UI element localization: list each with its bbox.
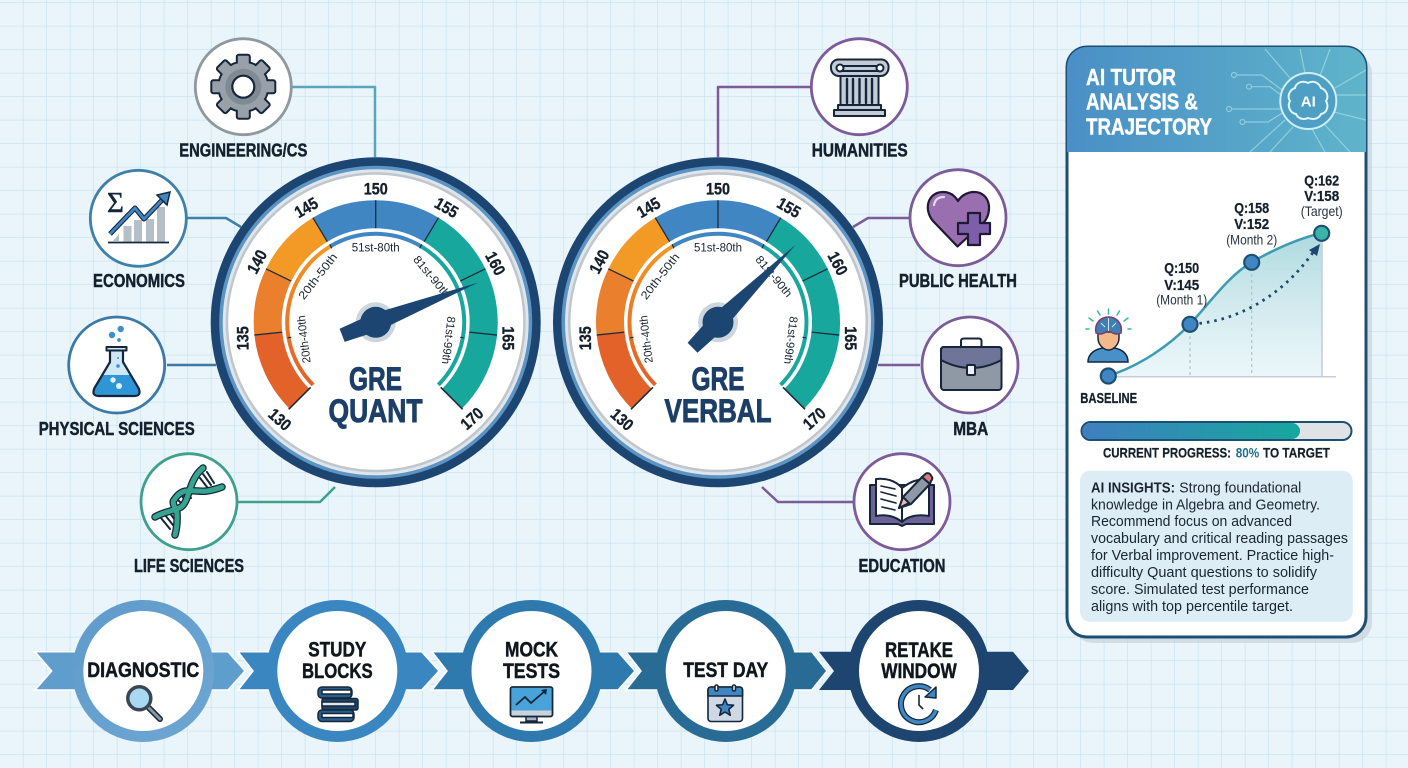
scale labels: verbal: 160 xyxy=(824,249,851,279)
scale labels: verbal: 170 xyxy=(800,404,830,434)
panel title: ANALYSIS & xyxy=(1086,88,1198,114)
connector: engineering xyxy=(291,87,375,157)
label: target: V:158 xyxy=(1304,188,1339,205)
AI insights box: vocabulary and critical reading passages xyxy=(1091,530,1348,547)
panel: life sciences discipline xyxy=(134,454,244,576)
icon: monitor with chart xyxy=(510,687,552,722)
AI insights box: knowledge in Algebra and Geometry. xyxy=(1091,496,1320,513)
AI insights box: difficulty Quant questions to solidify xyxy=(1091,564,1317,581)
percentile labels: quant: 20th-50th xyxy=(297,252,340,302)
step: retake window: RETAKE xyxy=(885,638,953,662)
step: mock tests: MOCK xyxy=(505,638,558,662)
icon: circuit lines xyxy=(1226,49,1366,152)
percentile labels: quant: 81st-90th xyxy=(410,254,452,300)
step: study blocks xyxy=(272,606,403,736)
step: retake window: WINDOW xyxy=(881,659,957,683)
AI insights box: score. Simulated test performance xyxy=(1091,581,1309,598)
panel title xyxy=(1086,64,1212,140)
scale labels: verbal: 140 xyxy=(586,247,613,277)
icon: AI brain xyxy=(1289,82,1327,119)
panel header xyxy=(1067,47,1366,152)
AI insights box: AI INSIGHTS: xyxy=(1091,479,1175,496)
panel: MBA discipline xyxy=(922,317,1018,439)
panel: physical sciences discipline xyxy=(39,317,195,439)
icon: column xyxy=(831,60,889,116)
step: study blocks: BLOCKS xyxy=(302,659,373,683)
connector: public health xyxy=(853,218,909,227)
timeline step 5 ribbon xyxy=(819,652,1029,690)
progress bar xyxy=(1082,422,1352,461)
percentile labels: quant: 51st-80th xyxy=(352,242,400,254)
scale labels: verbal: 165 xyxy=(841,326,859,350)
step: retake window xyxy=(854,606,984,736)
panel: humanities discipline xyxy=(811,39,908,160)
percentile labels: verbal: 51st-80th xyxy=(694,242,742,254)
step: study blocks: STUDY xyxy=(308,638,366,662)
gauge title: verbal xyxy=(664,361,772,429)
icon: gear xyxy=(211,55,275,119)
icon: flask xyxy=(93,326,140,396)
needle: quant xyxy=(339,274,482,344)
icon: calendar with star xyxy=(708,685,742,722)
panel: education discipline xyxy=(854,454,950,576)
scale labels: verbal xyxy=(577,180,859,435)
percentile labels: verbal: 20th-40th xyxy=(638,315,656,364)
icon: AI brain: AI xyxy=(1301,94,1316,110)
percentile labels: verbal xyxy=(638,242,799,365)
step: mock tests: TESTS xyxy=(503,659,560,683)
AI insights box: Recommend focus on advanced xyxy=(1091,513,1292,530)
percentile labels: verbal: 81st-90th xyxy=(753,254,794,300)
panel: AI tutor analysis xyxy=(1067,47,1372,643)
icon: briefcase xyxy=(941,338,1002,390)
scale labels: quant: 140 xyxy=(244,247,271,277)
AI insights box: Strong foundational xyxy=(1179,479,1301,496)
percentile labels: quant: 81st-99th xyxy=(439,316,457,365)
icon: sigma and growth chart: Σ xyxy=(107,187,124,219)
scale labels: verbal: 135 xyxy=(577,326,595,350)
scale labels: quant: 165 xyxy=(499,326,517,350)
scale labels: verbal: 150 xyxy=(706,180,730,198)
label: month 1: V:145 xyxy=(1164,277,1199,294)
label: month 1: (Month 1) xyxy=(1156,292,1207,308)
scale labels: quant: 170 xyxy=(457,404,487,434)
panel: public health discipline xyxy=(899,170,1017,291)
step: test day: TEST DAY xyxy=(683,658,768,682)
label: humanities: HUMANITIES xyxy=(812,140,908,160)
step: mock tests xyxy=(466,606,597,736)
gauge: GRE Verbal xyxy=(553,157,883,487)
connector: MBA xyxy=(878,364,920,366)
step: test day xyxy=(660,606,791,736)
label: public health: PUBLIC HEALTH xyxy=(899,271,1017,291)
AI insights box xyxy=(1080,471,1353,622)
label: month 2: Q:158 xyxy=(1234,200,1269,217)
timeline step 2 ribbon xyxy=(238,652,439,690)
needle: verbal xyxy=(686,238,802,354)
progress label: TO TARGET xyxy=(1263,445,1330,461)
timeline step 3 ribbon xyxy=(432,652,635,690)
progress label xyxy=(1103,445,1330,461)
label: target xyxy=(1301,172,1343,219)
gauge title: quant: GRE xyxy=(349,361,402,397)
step: diagnostic: DIAGNOSTIC xyxy=(87,658,199,682)
icon: stacked books xyxy=(318,687,358,722)
icon: heart with cross xyxy=(928,192,990,246)
panel title: AI TUTOR xyxy=(1086,64,1176,90)
label: economics: ECONOMICS xyxy=(93,271,185,291)
panel title: TRAJECTORY xyxy=(1086,114,1212,140)
scale labels: quant xyxy=(235,180,517,435)
label: engineering: ENGINEERING/CS xyxy=(179,140,307,160)
gauge: GRE Quant xyxy=(211,157,541,487)
panel: engineering discipline xyxy=(179,39,307,160)
label: month 1: Q:150 xyxy=(1164,260,1199,277)
scale labels: quant: 130 xyxy=(264,405,294,435)
gauge title: verbal: GRE xyxy=(692,361,744,397)
label: month 2: (Month 2) xyxy=(1226,232,1277,248)
progress label: CURRENT PROGRESS: xyxy=(1103,445,1231,461)
progress label: 80% xyxy=(1236,445,1260,461)
label: baseline: BASELINE xyxy=(1080,390,1137,407)
label: physical sciences: PHYSICAL SCIENCES xyxy=(39,419,195,439)
icon: magnifying glass xyxy=(128,687,160,719)
label: target: (Target) xyxy=(1301,203,1343,219)
connector: life sciences xyxy=(238,487,335,502)
percentile labels: verbal: 81st-99th xyxy=(781,316,799,365)
AI insights box: for Verbal improvement. Practice high- xyxy=(1091,547,1334,564)
icon: DNA helix xyxy=(155,468,222,535)
connector: physical sciences xyxy=(167,364,216,366)
scale labels: quant: 150 xyxy=(364,180,388,198)
label: month 2 xyxy=(1226,200,1277,248)
scale labels: verbal: 145 xyxy=(634,194,664,222)
timeline step 4 ribbon xyxy=(626,652,827,690)
scale labels: quant: 155 xyxy=(431,194,461,222)
connector: economics xyxy=(187,218,241,227)
icon: student with brain xyxy=(1086,309,1131,362)
scale labels: quant: 145 xyxy=(292,194,321,222)
percentile labels: verbal: 20th-50th xyxy=(639,252,682,302)
label: MBA: MBA xyxy=(953,419,988,439)
gauge title: quant xyxy=(328,361,423,429)
gauge title: quant: QUANT xyxy=(328,393,423,429)
label: education: EDUCATION xyxy=(858,556,946,576)
gauge title: verbal: VERBAL xyxy=(664,393,772,429)
label: life sciences: LIFE SCIENCES xyxy=(134,556,244,576)
percentile labels: quant: 20th-40th xyxy=(296,315,314,364)
trajectory chart xyxy=(1080,172,1343,407)
label: target: Q:162 xyxy=(1304,172,1339,190)
step: diagnostic xyxy=(78,606,209,736)
timeline step 1 ribbon xyxy=(35,652,245,690)
scale labels: quant: 135 xyxy=(235,326,253,350)
scale labels: verbal: 155 xyxy=(774,194,803,222)
label: month 2: V:152 xyxy=(1234,216,1269,233)
scale labels: quant: 160 xyxy=(481,249,508,279)
scale labels: verbal: 130 xyxy=(607,405,637,435)
connector: humanities xyxy=(718,87,810,157)
percentile labels: quant xyxy=(296,242,457,365)
icon: open book with pencil xyxy=(870,473,934,526)
AI insights box: aligns with top percentile target. xyxy=(1091,598,1293,615)
connector: education xyxy=(762,487,853,502)
label: month 1 xyxy=(1156,260,1207,308)
icon: circular arrow clock xyxy=(901,686,936,722)
panel: economics discipline xyxy=(90,170,186,291)
